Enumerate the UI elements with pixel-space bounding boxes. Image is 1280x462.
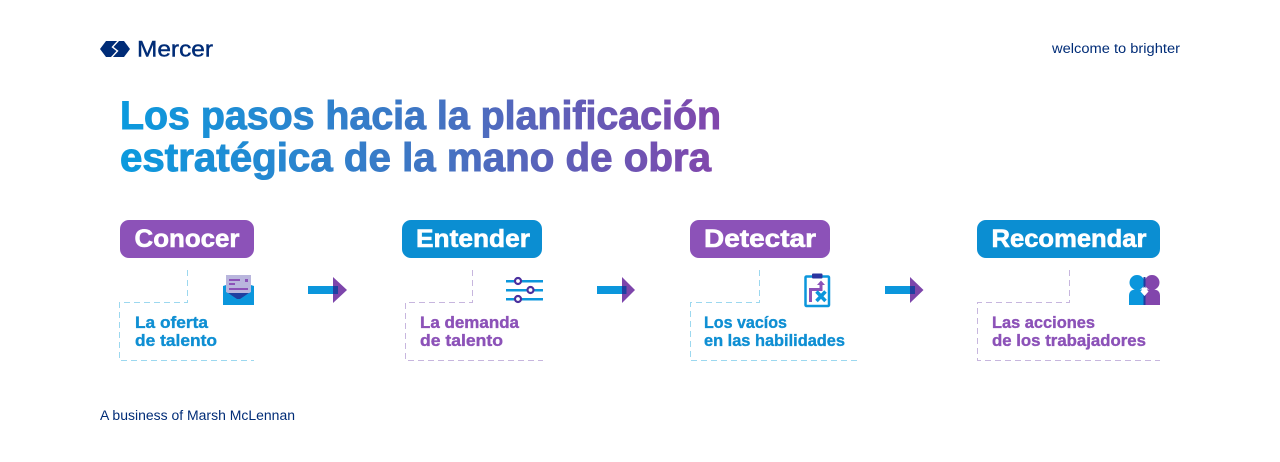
label: Los vacíos en las habilidades: en las habilidades [704,332,845,350]
dashed connector and label frame [120,270,254,360]
label: Las acciones de los trabajadores: Las acciones [992,314,1095,332]
step 2: Entender [402,220,543,360]
label: Los vacíos en las habilidades: Los vacíos [704,314,787,332]
arrow 1 [308,277,347,303]
label: Las acciones de los trabajadores: de los trabajadores [992,332,1146,350]
dashed connector and label frame [978,270,1160,360]
pill: Detectar [690,220,830,258]
footer text: A business of Marsh McLennan [100,408,295,423]
arrow 3 [885,277,924,303]
label: Los vacíos en las habilidades [704,314,845,350]
logo: Mercer [100,36,213,62]
pill: Entender: Entender [416,225,530,253]
pill: Recomendar [977,220,1160,258]
pill: Conocer: Conocer [134,225,240,253]
dashed connector and label frame [406,270,543,360]
title [120,94,721,180]
arrow 2 [597,277,635,303]
label: La oferta de talento [135,314,217,350]
step 1: Conocer [120,220,254,360]
pill: Recomendar: Recomendar [992,225,1147,253]
dashed connector and label frame [690,270,858,360]
logo wordmark: Mercer [137,36,213,62]
label: Las acciones de los trabajadores [992,314,1146,350]
tagline: welcome to brighter [1051,41,1181,56]
label: La demanda de talento: La demanda [420,314,520,332]
label: La demanda de talento [420,314,520,350]
label: La oferta de talento: de talento [135,332,217,350]
step 3: Detectar [690,220,858,360]
icon: Mercer mark [100,40,130,58]
icon: clipboard [806,274,829,306]
pill: Detectar: Detectar [704,225,816,253]
icon: two people [1129,275,1160,305]
icon: sliders [506,278,543,302]
label: La oferta de talento: La oferta [135,314,209,332]
title: Los pasos hacia la planificación [120,94,721,138]
step 4: Recomendar [977,220,1160,360]
label: La demanda de talento: de talento [420,332,503,350]
pill: Entender [402,220,542,258]
pill: Conocer [120,220,254,258]
icon: envelope with card [223,275,254,305]
title: estratégica de la mano de obra [120,136,712,180]
